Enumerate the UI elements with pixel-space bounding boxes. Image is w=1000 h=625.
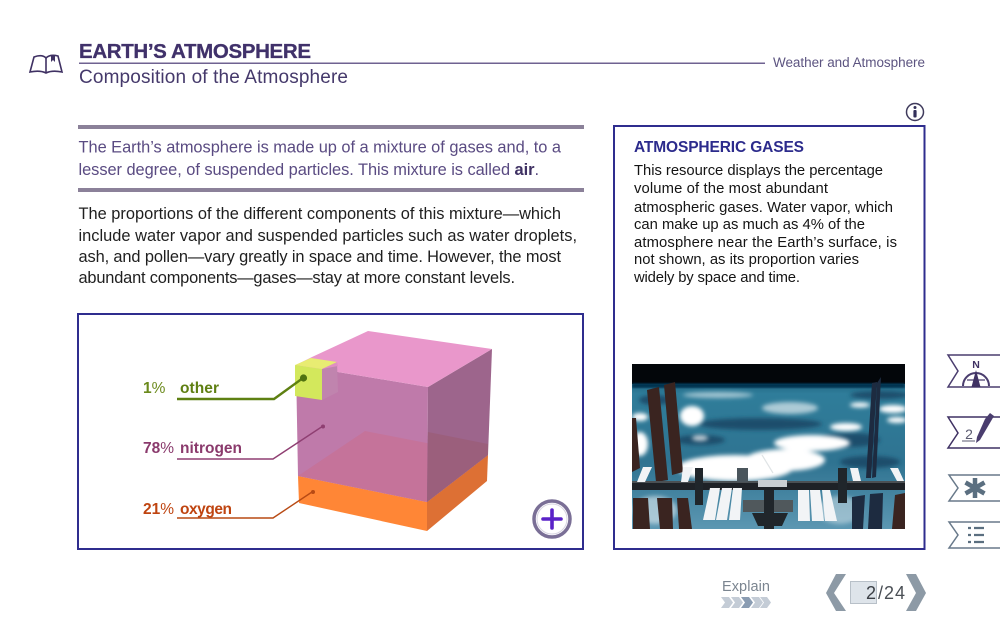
- icon: list tab: [949, 522, 1000, 548]
- panel text: atmosphere near the Earth’s surface, is: [634, 235, 897, 251]
- page navigation: 2: [866, 583, 876, 603]
- icon: compass tab: N: [972, 359, 980, 371]
- icon: open book: [30, 55, 62, 73]
- intro text block: lesser degree, of suspended particles. This mixture is called air.: [78, 161, 539, 179]
- body paragraph: include water vapor and suspended particles such as water droplets,: [78, 227, 577, 245]
- label: other: [143, 374, 307, 399]
- body paragraph: The proportions of the different components of this mixture—which: [78, 205, 561, 223]
- icon: info: [906, 104, 924, 120]
- icon: glossary tab: [949, 475, 1000, 501]
- solar arrays: [632, 382, 905, 529]
- label: nitrogen: 78%: [143, 440, 174, 457]
- truss: [632, 483, 905, 490]
- intro text block: The Earth’s atmosphere is made up of a mixture of gases and, to a: [78, 138, 562, 156]
- section label: Weather and Atmosphere: [773, 55, 925, 70]
- header rule: [79, 62, 765, 64]
- page navigation: [826, 574, 926, 611]
- panel text: can make up as much as 4% of the: [634, 217, 865, 233]
- label: oxygen: [143, 490, 315, 518]
- icon: plus button: [534, 501, 570, 537]
- label: oxygen: 21%: [143, 501, 174, 518]
- station modules: [695, 455, 847, 529]
- page navigation: /24: [878, 583, 905, 603]
- label: nitrogen: nitrogen: [180, 440, 242, 457]
- panel text: widely by space and time.: [633, 270, 800, 286]
- subtitle: Composition of the Atmosphere: [79, 67, 348, 88]
- radiators: [637, 467, 904, 521]
- panel heading: ATMOSPHERIC GASES: [634, 139, 804, 156]
- body paragraph: abundant components—gases—stay at more constant levels.: [78, 269, 515, 287]
- label: other: other: [180, 380, 219, 397]
- cube chart: [295, 331, 492, 531]
- label: nitrogen: [143, 424, 325, 459]
- body paragraph: [78, 205, 577, 287]
- panel: atmospheric gases: [614, 126, 924, 549]
- icon: notes tab: 2: [965, 426, 973, 442]
- photo: space station above Earth: [632, 364, 910, 529]
- explain progress: Explain: [722, 579, 770, 595]
- icon: compass tab: [948, 355, 1000, 387]
- panel text: volume of the most abundant: [634, 181, 828, 197]
- body paragraph: ash, and pollen—vary greatly in space and time. However, the most: [78, 248, 561, 266]
- label: oxygen: oxygen: [180, 501, 232, 518]
- explain progress: [721, 579, 771, 608]
- panel text: This resource displays the percentage: [634, 163, 883, 179]
- icon: notes tab: [948, 413, 1000, 448]
- panel text: [633, 163, 897, 286]
- panel: atmospheric composition chart: [78, 314, 583, 549]
- panel text: atmospheric gases. Water vapor, which: [634, 200, 893, 216]
- title: EARTH’S ATMOSPHERE: [79, 40, 311, 63]
- panel text: not shown, as its proportion varies: [634, 252, 859, 268]
- label: other: 1%: [143, 380, 166, 397]
- intro text block: [78, 125, 584, 192]
